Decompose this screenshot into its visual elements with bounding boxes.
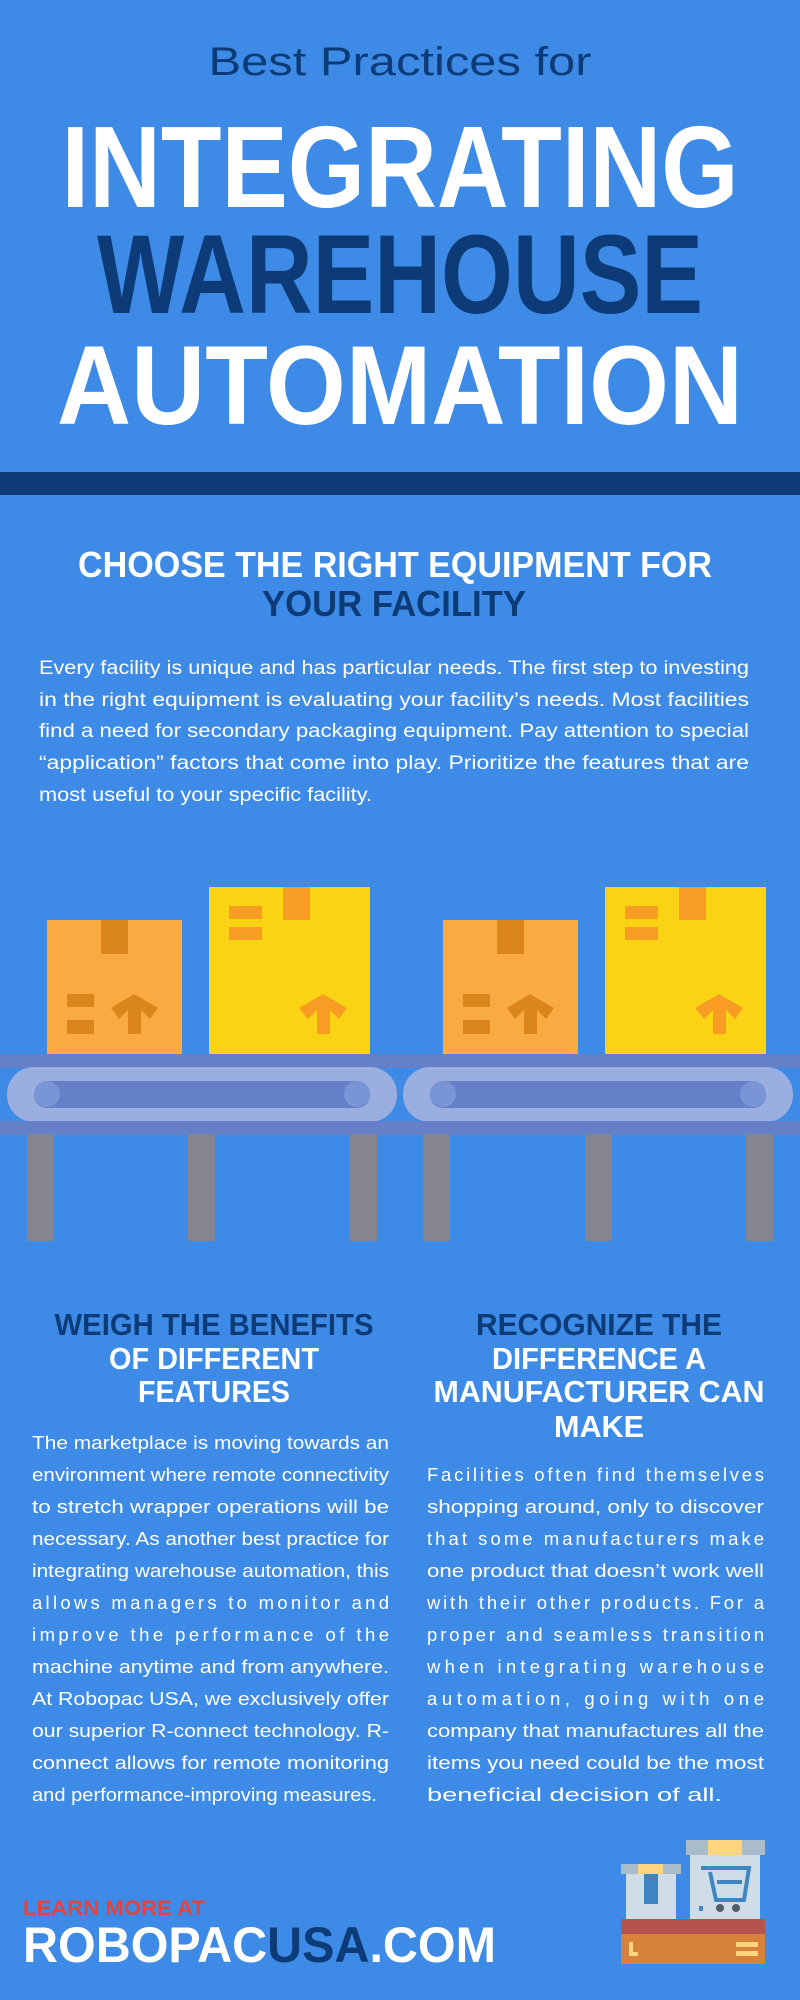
- heading: choose the right equipment: YOUR FACILITY: [262, 583, 526, 624]
- text block: intro paragraph: most useful to your specific facility.: [39, 785, 372, 806]
- text block: weigh the benefits: to stretch wrapper operations will be: [32, 1496, 389, 1517]
- text block: weigh the benefits: improve the performance of the: [32, 1624, 389, 1645]
- text block: recognize the difference: Facilities often find themselves: [427, 1464, 764, 1485]
- text block: recognize the difference: shopping around, only to discover: [427, 1496, 764, 1517]
- text block: intro paragraph: [39, 658, 749, 806]
- heading: recognize the difference: [434, 1307, 764, 1444]
- box: yellow left: [209, 887, 370, 1054]
- heading: weigh the benefits: [54, 1307, 374, 1409]
- text block: weigh the benefits: [32, 1432, 390, 1805]
- text block: weigh the benefits: allows managers to monitor and: [32, 1592, 389, 1613]
- text block: intro paragraph: find a need for secondary packaging equipment. Pay attention to special: [39, 721, 749, 742]
- text block: weigh the benefits: The marketplace is moving towards an: [32, 1432, 389, 1453]
- text block: intro paragraph: in the right equipment is evaluating your facility’s needs. Most facilities: [39, 690, 749, 711]
- text block: recognize the difference: beneficial decision of all.: [427, 1784, 722, 1805]
- text block: weigh the benefits: necessary. As another best practice for: [32, 1528, 389, 1549]
- footer: learn more: ROBOPACUSA.COM: [23, 1917, 496, 1973]
- text block: recognize the difference: [426, 1464, 765, 1805]
- text block: recognize the difference: that some manufacturers make: [427, 1528, 764, 1549]
- text block: recognize the difference: with their other products. For a: [426, 1592, 765, 1613]
- title: Best Practices for: [208, 40, 592, 84]
- text block: weigh the benefits: connect allows for remote monitoring: [32, 1752, 389, 1773]
- icon: packages with cart: [621, 1840, 765, 1964]
- heading: recognize the difference: RECOGNIZE THE: [476, 1307, 722, 1342]
- heading: weigh the benefits: OF DIFFERENT: [109, 1341, 319, 1376]
- text block: weigh the benefits: and performance-improving measures.: [32, 1784, 377, 1805]
- box: orange right: [443, 920, 578, 1054]
- text block: recognize the difference: when integrating warehouse: [426, 1656, 764, 1677]
- text block: recognize the difference: company that manufactures all the: [427, 1720, 764, 1741]
- text block: weigh the benefits: our superior R-connect technology. R-: [32, 1720, 389, 1741]
- heading: recognize the difference: MAKE: [554, 1409, 644, 1444]
- heading: recognize the difference: DIFFERENCE A: [492, 1341, 706, 1376]
- text block: weigh the benefits: machine anytime and from anywhere.: [32, 1656, 389, 1677]
- heading: choose the right equipment: CHOOSE THE RIGHT EQUIPMENT FOR: [78, 544, 712, 585]
- heading: recognize the difference: MANUFACTURER CAN: [434, 1374, 764, 1409]
- heading: weigh the benefits: WEIGH THE BENEFITS: [54, 1307, 374, 1342]
- text block: weigh the benefits: environment where remote connectivity: [32, 1464, 390, 1485]
- title: [57, 40, 743, 448]
- text block: weigh the benefits: integrating warehouse automation, this: [32, 1560, 389, 1581]
- box: yellow right: [605, 887, 766, 1054]
- title: AUTOMATION: [57, 323, 743, 448]
- heading: weigh the benefits: FEATURES: [138, 1374, 290, 1409]
- text block: recognize the difference: proper and seamless transition: [427, 1624, 764, 1645]
- illustration: conveyor belt with boxes: [0, 887, 800, 1241]
- text block: recognize the difference: one product that doesn’t work well: [427, 1560, 764, 1581]
- box: orange left: [47, 920, 182, 1054]
- footer: learn more: LEARN MORE AT: [23, 1897, 205, 1920]
- text block: weigh the benefits: At Robopac USA, we exclusively offer: [32, 1688, 389, 1709]
- text block: intro paragraph: Every facility is unique and has particular needs. The first step to investing: [39, 658, 749, 679]
- heading: choose the right equipment: [78, 544, 712, 624]
- text block: recognize the difference: automation, going with one: [427, 1688, 764, 1709]
- text block: intro paragraph: “application” factors that come into play. Prioritize the features that are: [39, 753, 749, 774]
- text block: recognize the difference: items you need could be the most: [427, 1752, 764, 1773]
